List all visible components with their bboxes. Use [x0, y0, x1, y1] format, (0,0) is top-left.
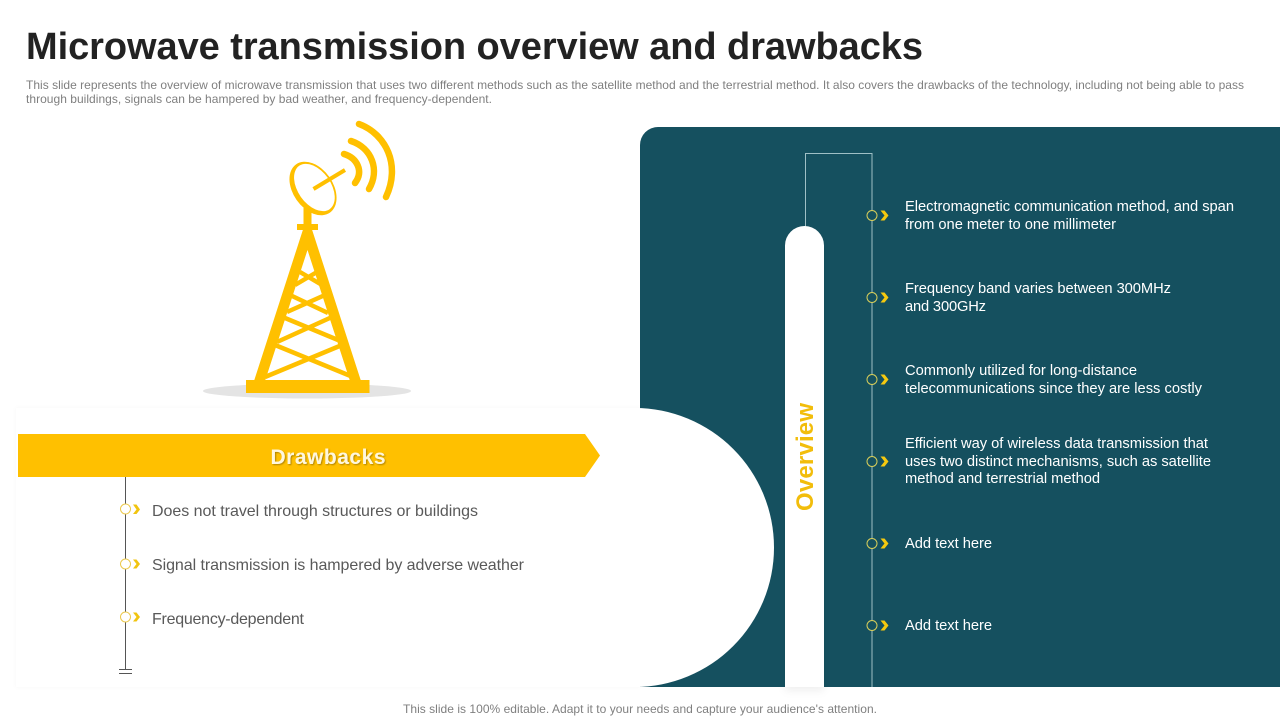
banner: drawbacks: Drawbacks — [270, 446, 386, 469]
overview item 3: telecommunications since they are less costly — [905, 381, 1203, 397]
signal waves — [344, 124, 392, 197]
tower frame — [254, 208, 361, 381]
subtitle description: This slide represents the overview of microwave transmission that uses two different methods such as the satellite method and the terrestrial method. It also covers the drawbacks of the technology, including not being able to pass — [26, 78, 1244, 92]
overview item 4 — [867, 436, 1211, 487]
drawback item 2: Signal transmission is hampered by adverse weather — [152, 557, 525, 574]
overview item 5 — [867, 536, 992, 552]
overview item 1: Electromagnetic communication method, and span — [905, 199, 1234, 215]
panel: overview background — [640, 127, 1280, 687]
overview item 2 — [867, 281, 1171, 315]
drawback item 3: Frequency-dependent — [152, 611, 305, 628]
satellite dish — [280, 153, 346, 224]
overview item 6: Add text here — [905, 618, 992, 634]
overview connector line — [806, 154, 872, 687]
overview pill — [785, 226, 824, 687]
subtitle description — [26, 78, 1244, 106]
overview item 2: Frequency band varies between 300MHz — [905, 281, 1171, 297]
drawback item 1: Does not travel through structures or buildings — [152, 503, 478, 520]
overview item 3: Commonly utilized for long-distance — [905, 363, 1137, 379]
overview item 4: uses two distinct mechanisms, such as satellite — [905, 454, 1211, 470]
overview item 2: and 300GHz — [905, 299, 986, 315]
overview item 4: Efficient way of wireless data transmission that — [905, 436, 1208, 452]
overview label: Overview — [792, 403, 819, 511]
overview item 1 — [867, 199, 1234, 233]
subtitle description: through buildings, signals can be hampered by bad weather, and frequency-dependent. — [26, 92, 492, 106]
tower ground shadow — [203, 384, 411, 398]
overview item 3 — [867, 363, 1203, 397]
overview item 5: Add text here — [905, 536, 992, 552]
footer note: This slide is 100% editable. Adapt it to your needs and capture your audience's attention. — [403, 702, 877, 716]
title: Microwave transmission overview and drawbacks — [26, 26, 923, 68]
tower base — [246, 380, 370, 393]
overview item 4: method and terrestrial method — [905, 471, 1100, 487]
banner: drawbacks — [18, 434, 600, 477]
panel: drawbacks card — [16, 408, 774, 687]
overview item 1: from one meter to one millimeter — [905, 217, 1116, 233]
icon: microwave tower — [203, 124, 411, 398]
drawbacks timeline — [119, 477, 525, 674]
tower cross braces — [265, 272, 353, 377]
overview item 6 — [867, 618, 992, 634]
